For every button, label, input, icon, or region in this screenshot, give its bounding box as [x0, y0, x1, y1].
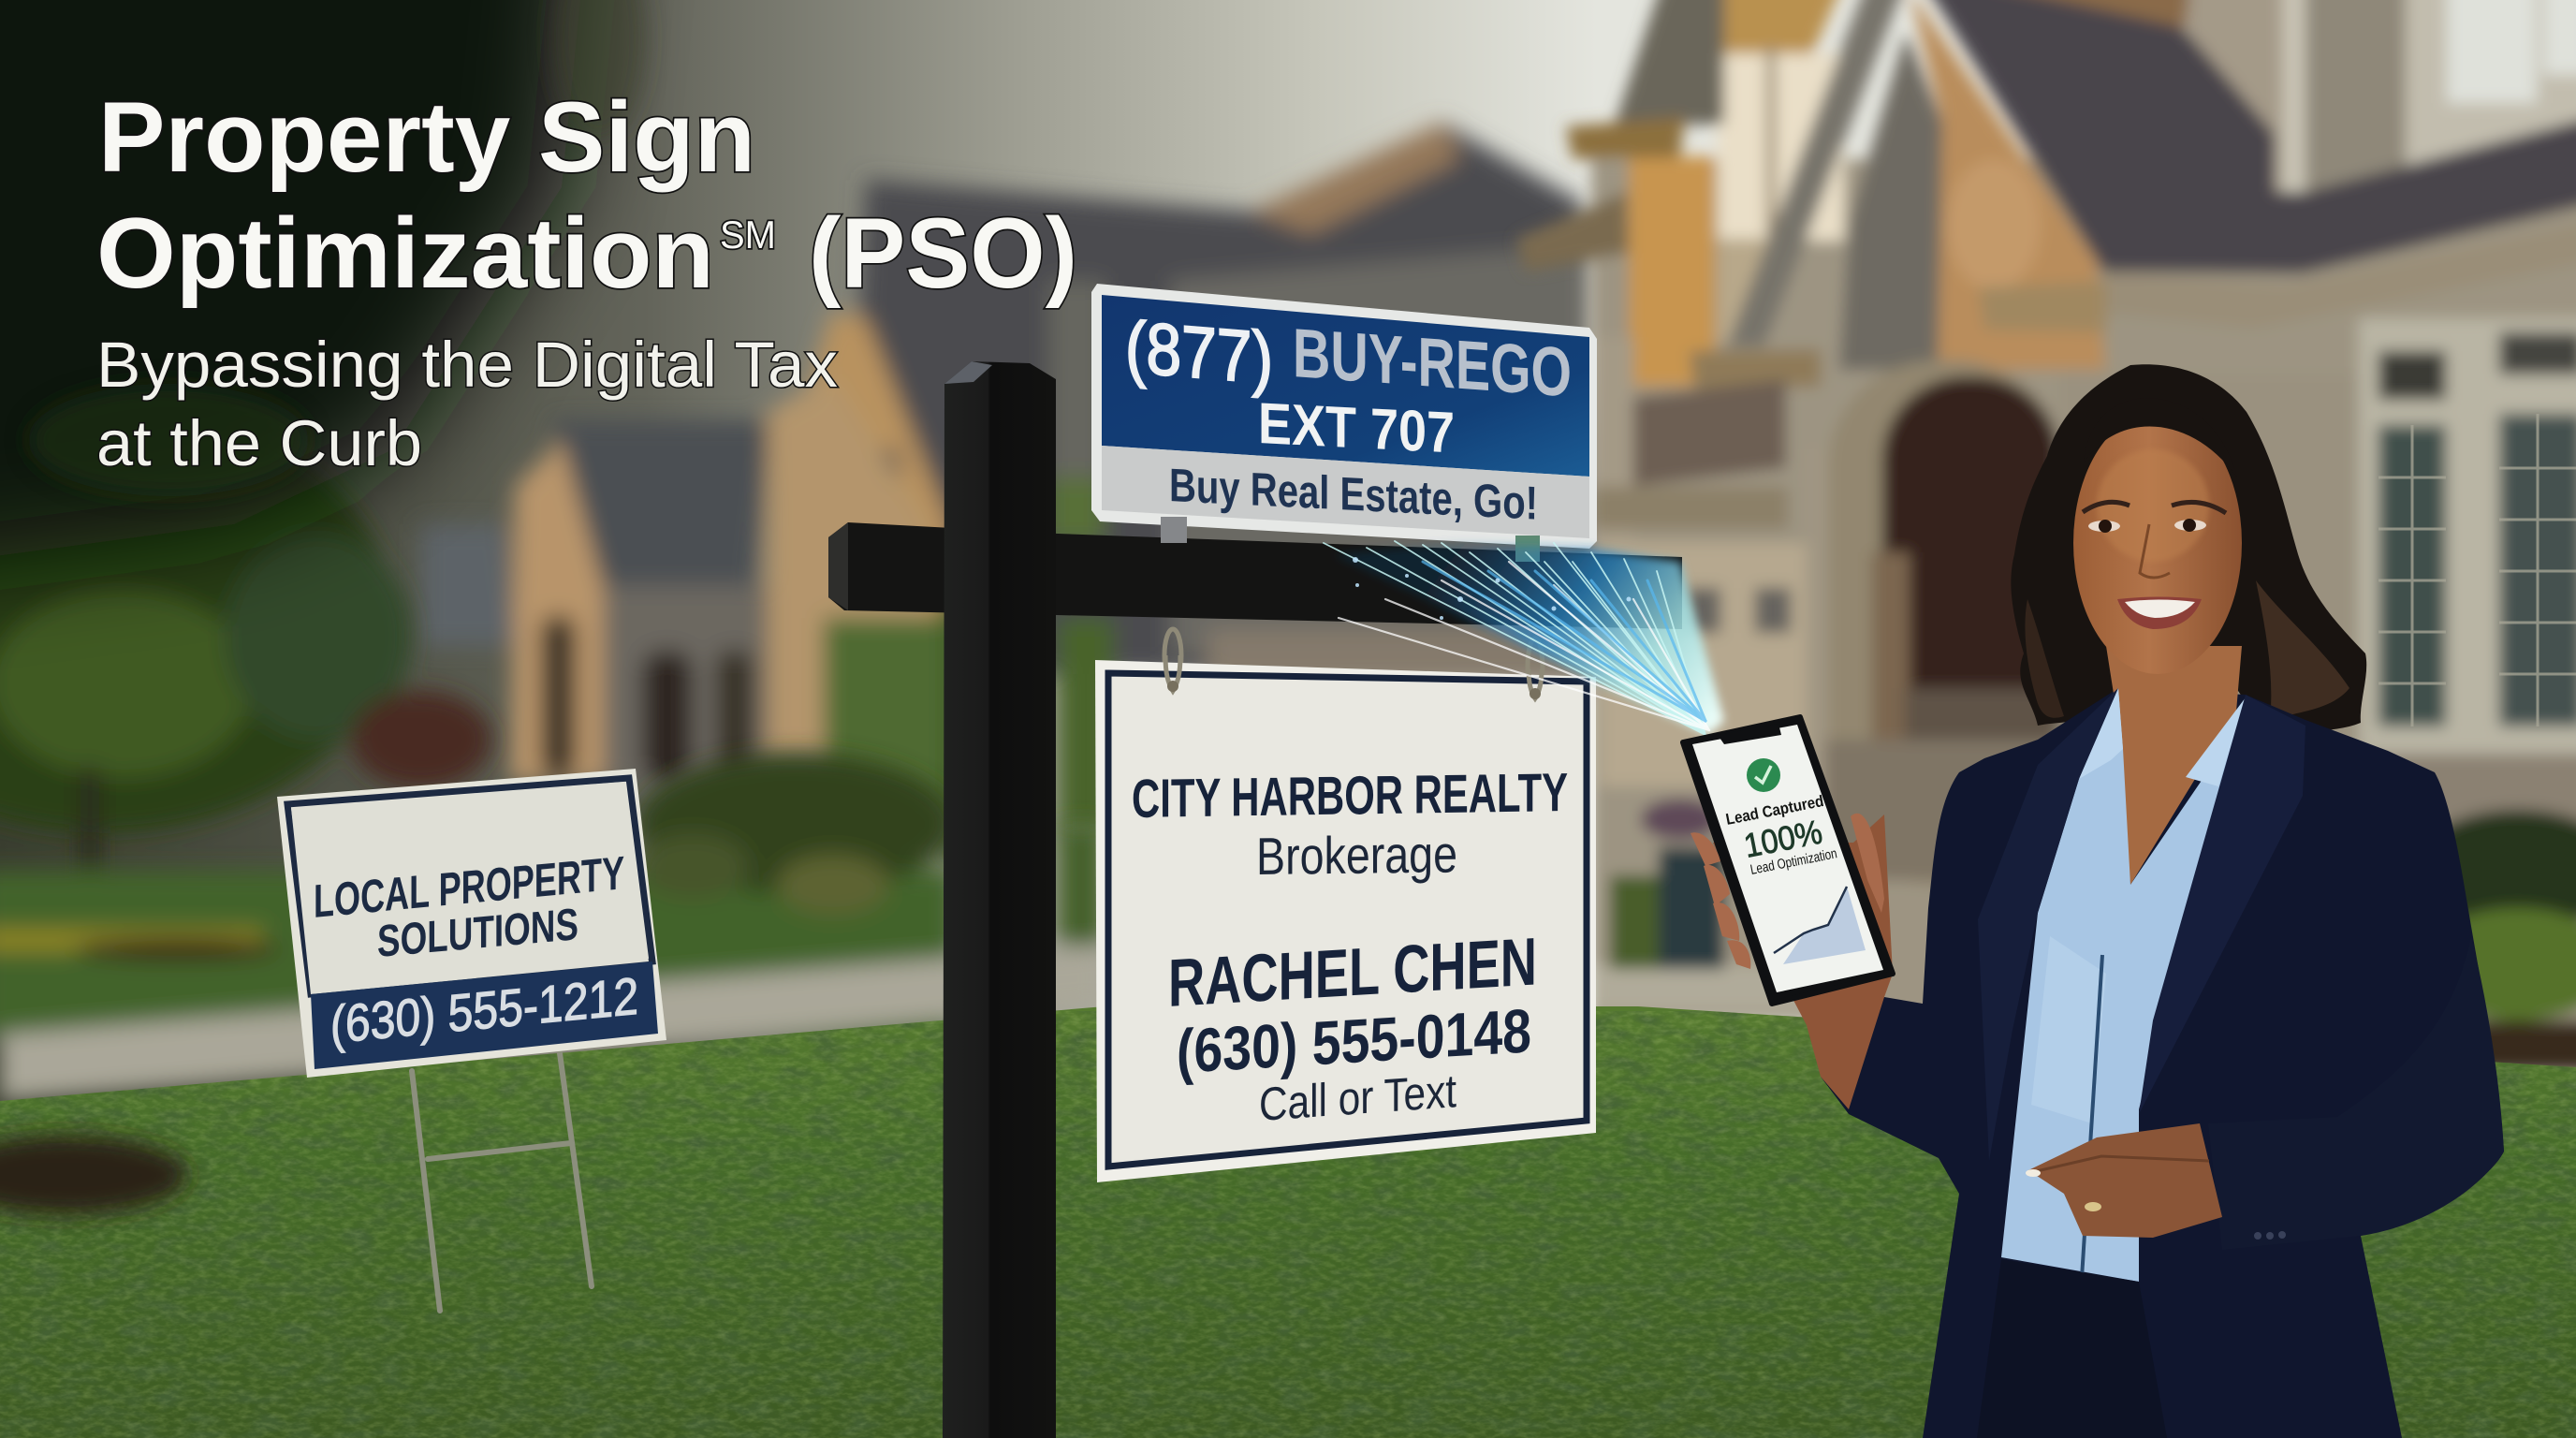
face	[2073, 398, 2242, 674]
ring hooks	[1164, 629, 1543, 695]
lower hand with ring	[2026, 1123, 2222, 1238]
tower and window	[1711, 0, 1844, 56]
phone text: optimization: Lead Optimization	[1749, 845, 1838, 878]
upper siding and window	[2186, 0, 2289, 206]
gutter	[2103, 221, 2576, 330]
shirt	[2001, 688, 2246, 1282]
crossarm	[828, 522, 1682, 629]
phone text: percent: 100%	[1741, 813, 1825, 865]
jacket	[1821, 688, 2504, 1438]
porch roof	[1690, 349, 1821, 389]
phone chart	[1774, 887, 1866, 964]
tagline panel	[1102, 446, 1589, 538]
window muntins	[2378, 414, 2576, 726]
headline line two: (PSO)	[809, 197, 1077, 309]
gray rake trims	[1615, 0, 1724, 125]
background: blurred neighbourhood	[0, 0, 2576, 1123]
left trees and yard	[0, 403, 1105, 1101]
brokerage label: Brokerage	[1256, 824, 1457, 886]
extension: EXT 707	[1258, 391, 1455, 465]
data beam from sign to phone	[1324, 541, 1724, 735]
vanity number: letters: BUY-REGO	[1293, 314, 1572, 411]
sign text: solutions: SOLUTIONS	[377, 899, 578, 967]
big house on the right	[1516, 0, 2576, 1072]
hanging brokerage sign	[1095, 629, 1596, 1182]
main roof	[1924, 0, 2576, 273]
pants	[1977, 1259, 2167, 1438]
title	[96, 81, 1077, 479]
agent phone: (630) 555-0148	[1177, 995, 1531, 1086]
subtitle line two: at the Curb	[96, 407, 422, 479]
agent name: RACHEL CHEN	[1168, 924, 1537, 1021]
headline line two: SM	[720, 213, 776, 257]
sign post	[828, 361, 1682, 1438]
stone gable	[1910, 0, 2106, 370]
wire stand	[412, 1053, 592, 1311]
vanity number: digits: (877)	[1125, 305, 1273, 400]
mounting clips	[1161, 517, 1187, 543]
lapels	[2139, 695, 2305, 1114]
check icon	[1747, 758, 1780, 792]
right sleeve	[2208, 936, 2504, 1250]
subtitle line one: Bypassing the Digital Tax	[96, 329, 838, 401]
hair	[2011, 364, 2366, 735]
sign text: company: LOCAL PROPERTY	[314, 846, 624, 928]
screen	[1692, 725, 1883, 992]
smartphone	[1683, 717, 1893, 1004]
dark tree vignette	[0, 0, 599, 580]
brokerage name: CITY HARBOR REALTY	[1132, 762, 1568, 829]
headline line two: Optimization	[96, 197, 714, 309]
lower windows	[2359, 318, 2576, 758]
neck	[2106, 646, 2242, 885]
sign board	[1095, 660, 1596, 1182]
blue phone panel	[1102, 295, 1589, 477]
notch	[1718, 724, 1781, 744]
call to action: Call or Text	[1259, 1064, 1456, 1131]
foreground lawn	[0, 1006, 2576, 1438]
upright post	[943, 361, 1056, 1438]
sign text: phone: (630) 555-1212	[330, 966, 638, 1054]
hook eyes	[1165, 655, 1542, 699]
phone body	[1683, 717, 1893, 1004]
agent	[1713, 364, 2504, 1438]
rider sign	[1091, 284, 1597, 562]
phone band	[311, 961, 658, 1069]
competitor yard sign	[277, 769, 666, 1311]
phone text: lead captured: Lead Captured	[1724, 792, 1825, 829]
fingers on phone edge	[1690, 814, 1884, 969]
garage	[1601, 543, 1825, 786]
headline line one: Property Sign	[98, 81, 755, 193]
placket line	[2082, 955, 2102, 1278]
sign board	[277, 769, 666, 1078]
center houses	[421, 123, 1610, 861]
rider board	[1091, 284, 1597, 549]
phone hand back	[1713, 814, 1893, 1109]
driveway, planting	[1591, 964, 1835, 1011]
arch entry	[1828, 360, 2062, 885]
tagline: Buy Real Estate, Go!	[1169, 459, 1538, 530]
